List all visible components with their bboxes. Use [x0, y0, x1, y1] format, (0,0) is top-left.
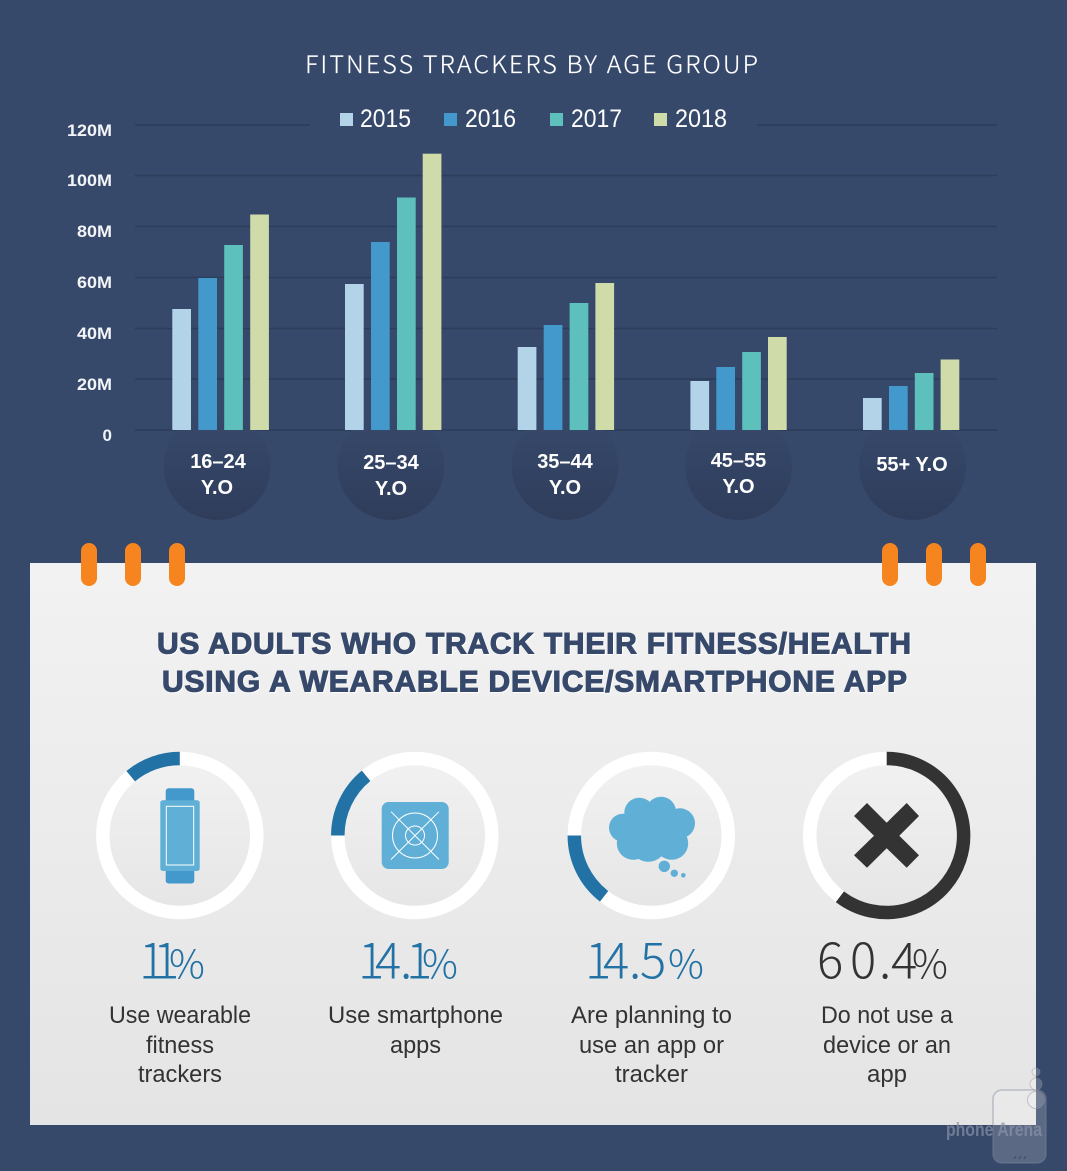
age group 45–55: [685, 337, 792, 520]
percentage: 14.5%: [585, 922, 704, 994]
legend: 2016: [465, 105, 516, 133]
y axis labels: 80M: [77, 222, 112, 241]
age group 25–34: 25–34: [363, 452, 420, 474]
panel heading: USING A WEARABLE DEVICE/SMARTPHONE APP: [162, 666, 907, 698]
age group 25–34: Y.O: [375, 478, 407, 500]
legend: 2017: [571, 105, 622, 133]
legend: 2018: [675, 105, 727, 133]
progress ring 14.1%: [338, 758, 492, 912]
icon: thought cloud: [609, 797, 695, 878]
percentage: 11%: [139, 922, 205, 994]
progress ring 14.5%: [574, 758, 728, 912]
description: apps: [390, 1032, 441, 1059]
stat: do not use 60.4%: [810, 758, 964, 1088]
description: device or an: [823, 1032, 951, 1059]
description: fitness: [146, 1032, 214, 1059]
description: use an app or: [579, 1032, 724, 1059]
y axis labels: 60M: [77, 273, 112, 292]
age group 35–44: [512, 283, 618, 520]
progress ring 60.4%: [810, 758, 964, 912]
progress ring 11%: [103, 758, 257, 912]
stat: planning to use 14.5%: [571, 758, 732, 1088]
percentage: 14.1%: [358, 922, 458, 994]
chart title: FITNESS TRACKERS BY AGE GROUP: [305, 45, 760, 80]
icon: app: [382, 802, 449, 869]
y axis labels: 100M: [67, 171, 112, 190]
description: [821, 1002, 954, 1088]
icon: cross: [854, 803, 919, 868]
age group 35–44: Y.O: [549, 477, 581, 499]
panel: US adults survey: [30, 543, 1036, 1125]
age group 35–44: 35–44: [537, 451, 594, 473]
description: Use wearable: [109, 1002, 251, 1029]
description: trackers: [138, 1061, 222, 1088]
y axis labels: 0: [103, 426, 112, 445]
watermark: phoneArena: phone Arena: [946, 1120, 1042, 1141]
age group 55+: [859, 360, 966, 520]
legend: 2015: [360, 105, 411, 133]
binder pins left: [81, 543, 185, 586]
y axis labels: 120M: [67, 121, 112, 140]
panel heading: US ADULTS WHO TRACK THEIR FITNESS/HEALTH: [157, 628, 911, 660]
age group 16–24: Y.O: [201, 477, 233, 499]
watermark: phoneArena: [946, 1068, 1046, 1163]
description: Use smartphone: [328, 1002, 503, 1029]
binder pins right: [882, 543, 986, 586]
age group 45–55: 45–55: [711, 450, 766, 472]
stat: wearable fitness trackers 11%: [103, 758, 257, 1088]
age group 45–55: Y.O: [722, 476, 755, 498]
description: app: [867, 1061, 907, 1088]
percentage: 60.4%: [817, 922, 948, 994]
y axis labels: [67, 121, 112, 445]
y axis labels: 20M: [77, 375, 112, 394]
age group 25–34: [338, 154, 444, 520]
age group 16–24: [164, 214, 270, 520]
panel heading: [157, 628, 911, 698]
description: Are planning to: [571, 1002, 732, 1029]
y axis labels: 40M: [77, 324, 112, 343]
description: [571, 1002, 732, 1088]
stat: smartphone apps 14.1%: [328, 758, 503, 1059]
age group 16–24: 16–24: [190, 451, 247, 473]
description: tracker: [615, 1061, 688, 1088]
bar chart: fitness trackers by age group: [67, 105, 997, 520]
legend: [340, 105, 727, 133]
icon: fitness band: [160, 788, 200, 884]
description: [328, 1002, 503, 1059]
description: Do not use a: [821, 1002, 954, 1029]
description: [109, 1002, 251, 1088]
age group 55+: 55+ Y.O: [876, 454, 948, 476]
